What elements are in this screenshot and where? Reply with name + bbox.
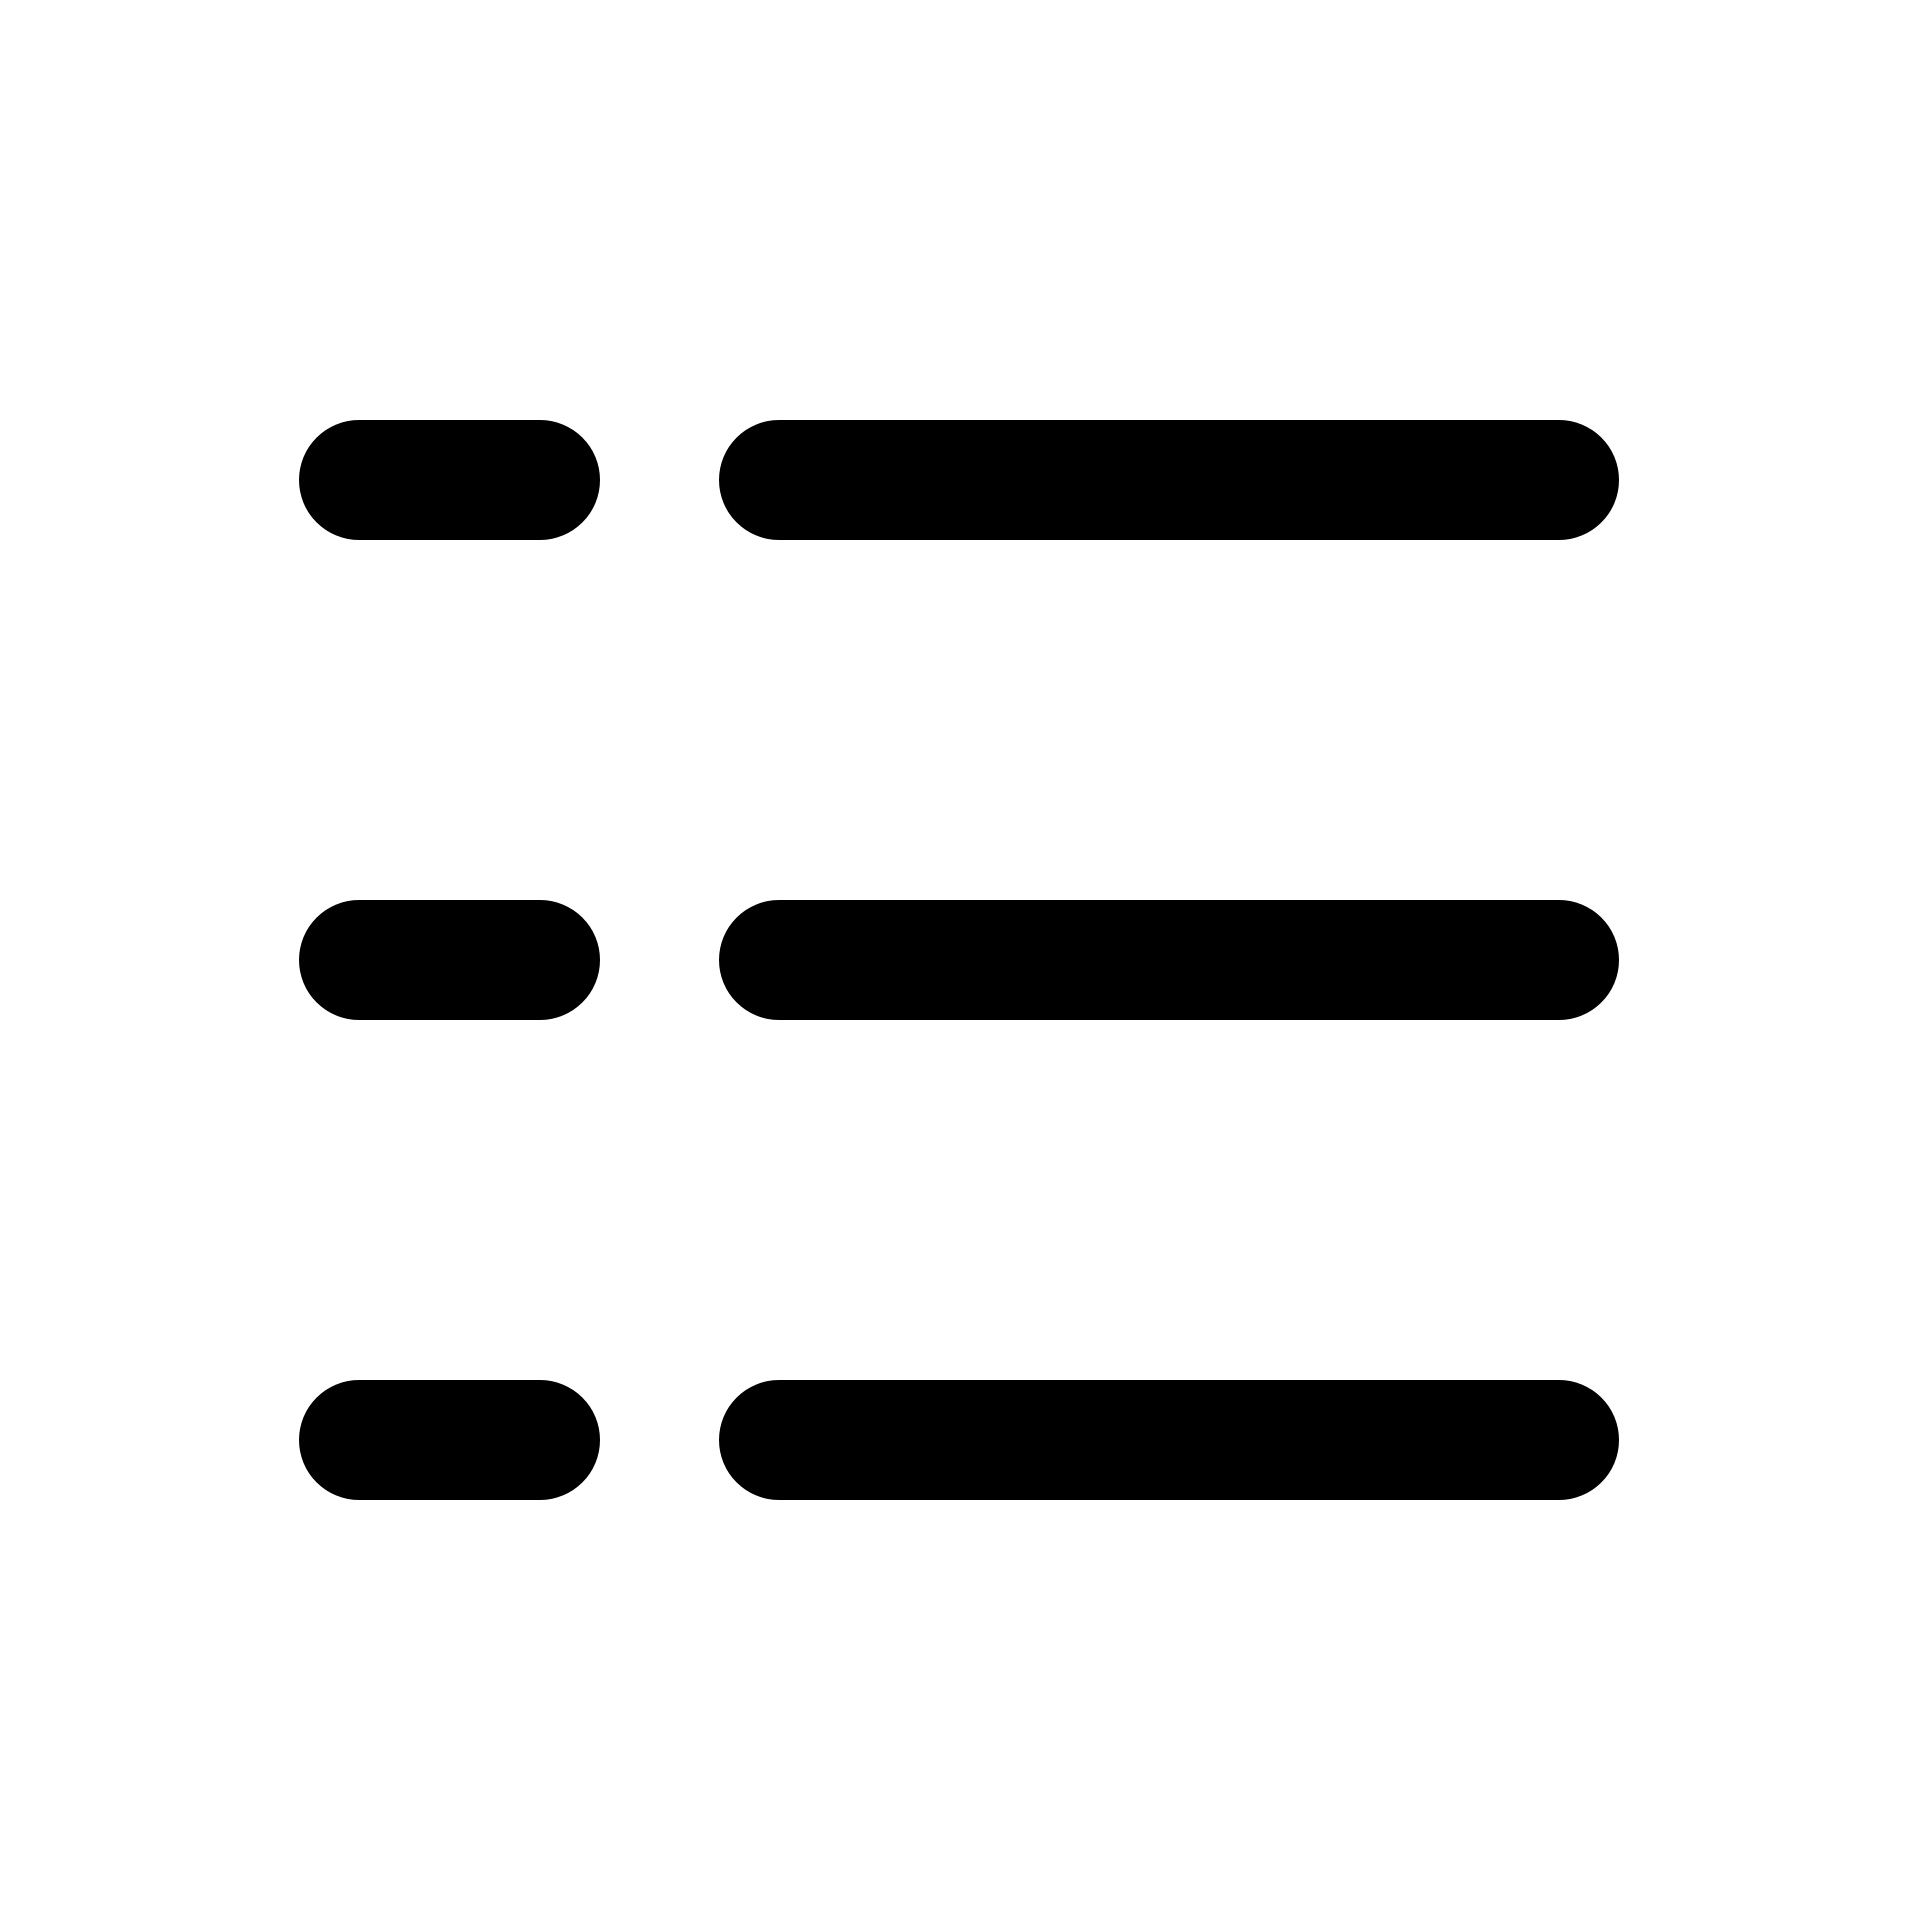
list row 3 <box>299 1380 1619 1500</box>
list row 2 <box>299 900 1619 1020</box>
list row 1 <box>299 420 1619 540</box>
